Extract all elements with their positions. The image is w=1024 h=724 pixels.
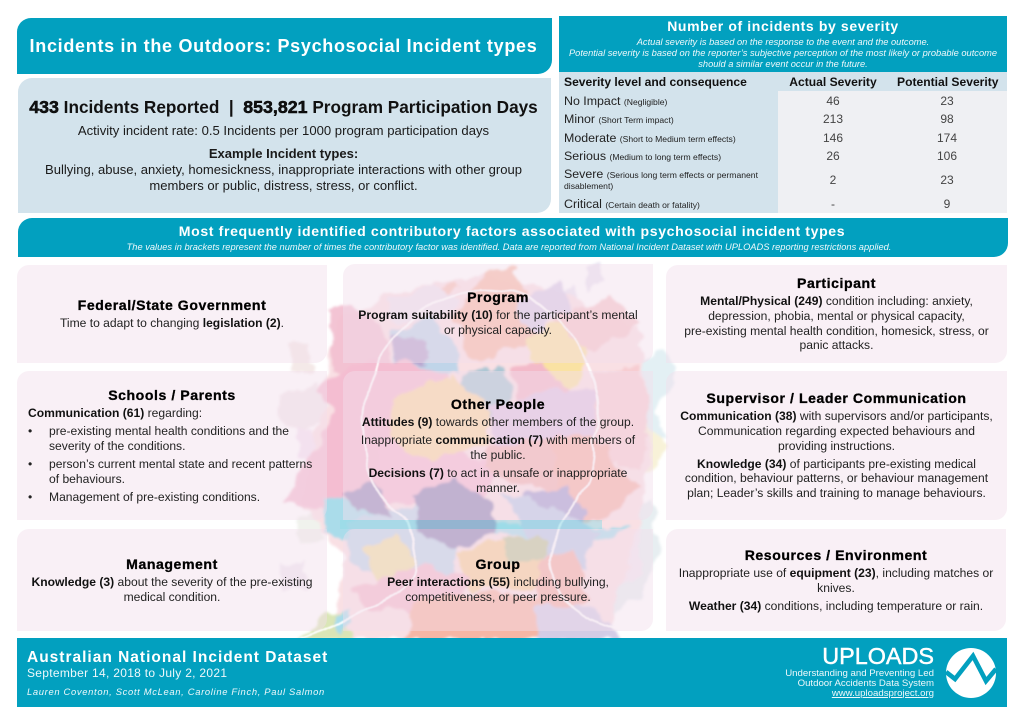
panel: Schools / Parents: pre-existing mental health conditions and the xyxy=(49,424,289,438)
panel: Management: Knowledge (3) about the severity of the pre-existing xyxy=(32,575,312,589)
table rows: Critical (Certain death or fatality) xyxy=(564,197,700,211)
UPLOADS wordmark xyxy=(785,643,934,699)
footer xyxy=(17,638,1007,707)
panel: Other People xyxy=(343,371,653,520)
dataset title: Australian National Incident Dataset xyxy=(27,649,328,666)
panel: Participant xyxy=(666,265,1007,363)
panel: Program: Program xyxy=(467,289,529,305)
panel: Resources / Environment: Inappropriate use of equipment (23), including matches or xyxy=(679,566,993,580)
contributory factors banner: The values in brackets represent the number of times the contributory factor was identified. Data are reported from National Incident Dataset with UPLOADS reporting restrictions applied. xyxy=(127,242,891,252)
severity heading: Potential severity is based on the reporter’s subjective perception of the most likely or probable outcome xyxy=(569,48,997,58)
panel: Schools / Parents: Management of pre-existing conditions. xyxy=(49,490,260,504)
title banner: Incidents in the Outdoors: Psychosocial Incident types xyxy=(30,36,537,56)
panel: Management: medical condition. xyxy=(124,590,220,604)
table rows: 2 xyxy=(830,173,836,187)
panel: Group: competitiveness, or peer pressure. xyxy=(405,590,591,604)
example incident types: members or public, distress, stress, or conflict. xyxy=(149,178,418,193)
table rows: 98 xyxy=(940,112,954,126)
table rows: 26 xyxy=(826,149,840,163)
title banner xyxy=(17,18,552,74)
panel: Schools / Parents: person’s current mental state and recent patterns xyxy=(49,457,312,471)
panel: Group xyxy=(343,529,653,631)
panel: Supervisor / Leader Communication: plan; Leader’s skills and training to manage behaviours. xyxy=(687,486,986,500)
panel: Federal/State Government xyxy=(17,265,327,363)
panel: Federal/State Government: Federal/State Government xyxy=(78,297,266,313)
example incident types: Bullying, abuse, anxiety, homesickness, inappropriate interactions with other group xyxy=(45,162,522,177)
panel: Management: Management xyxy=(126,556,218,572)
panel: Other People: manner. xyxy=(476,481,520,495)
panel: Federal/State Government: Time to adapt to changing legislation (2). xyxy=(60,316,284,330)
table header row: Actual Severity xyxy=(789,74,877,88)
icon: UPLOADS logo xyxy=(946,648,996,698)
panel: Supervisor / Leader Communication: condition, behaviour patterns, or behaviour management xyxy=(685,471,988,485)
panel: Other People: the public. xyxy=(470,448,526,462)
table rows: Severe (Serious long term effects or permanent xyxy=(564,167,758,181)
panel: Schools / Parents xyxy=(17,371,327,520)
severity heading xyxy=(559,16,1007,72)
table rows xyxy=(564,94,957,211)
table rows: 146 xyxy=(823,131,843,145)
date range: September 14, 2018 to July 2, 2021 xyxy=(27,666,227,680)
panel: Participant: panic attacks. xyxy=(800,338,873,352)
panel: Group: Group xyxy=(475,556,521,572)
values background xyxy=(778,91,1007,213)
severity heading: Actual severity is based on the response to the event and the outcome. xyxy=(637,36,929,46)
headline totals: 433 Incidents Reported | 853,821 Program Participation Days xyxy=(29,97,538,117)
table header row: Potential Severity xyxy=(897,74,998,88)
panel: Participant: depression, phobia, mental or physical capacity, xyxy=(708,309,965,323)
panel: Other People: Inappropriate communication (7) with members of xyxy=(361,433,635,447)
table header row: Severity level and consequence xyxy=(564,74,747,88)
table rows: 213 xyxy=(823,112,843,126)
panel: Participant: Mental/Physical (249) condition including: anxiety, xyxy=(700,294,973,308)
panel: Supervisor / Leader Communication: Communication regarding expected behaviours and xyxy=(698,424,975,438)
panel: Supervisor / Leader Communication: Knowledge (34) of participants pre-existing medical xyxy=(697,457,976,471)
table rows: Minor (Short Term impact) xyxy=(564,112,674,126)
UPLOADS wordmark: Understanding and Preventing Led xyxy=(785,668,934,679)
panel: Program xyxy=(343,264,653,363)
table rows: 106 xyxy=(937,149,957,163)
panel: Program: Program suitability (10) for the participant’s mental xyxy=(358,308,638,322)
table rows: 23 xyxy=(940,94,954,108)
panel: incidents by severity xyxy=(559,16,1007,213)
contributory factors banner xyxy=(18,218,1008,257)
panel: Supervisor / Leader Communication: Supervisor / Leader Communication xyxy=(706,390,967,406)
panel: Resources / Environment: Resources / Environment xyxy=(745,547,927,563)
panel: Resources / Environment xyxy=(666,529,1006,631)
panel: summary statistics xyxy=(18,78,551,213)
panel: Schools / Parents: severity of the conditions. xyxy=(49,439,185,453)
panel: Schools / Parents: Communication (61) regarding: xyxy=(28,406,202,420)
panel: Management xyxy=(17,529,327,631)
panel: Supervisor / Leader Communication: providing instructions. xyxy=(778,439,895,453)
contributory factors banner: Most frequently identified contributory factors associated with psychosocial incident types xyxy=(179,223,845,239)
example incident types: Example Incident types: xyxy=(209,146,358,161)
panel: Schools / Parents: Schools / Parents xyxy=(108,387,236,403)
panel: Program: or physical capacity. xyxy=(444,323,552,337)
example incident types xyxy=(45,146,522,193)
UPLOADS wordmark: Outdoor Accidents Data System xyxy=(798,678,934,689)
table rows: 9 xyxy=(944,197,950,211)
panel: Participant: Participant xyxy=(797,275,876,291)
table rows: No Impact (Negligible) xyxy=(564,94,667,108)
panel: Other People: Attitudes (9) towards other members of the group. xyxy=(362,415,634,429)
severity heading: should a similar event occur in the future. xyxy=(698,58,868,68)
table header row xyxy=(564,74,998,88)
table rows: 46 xyxy=(826,94,840,108)
table rows: - xyxy=(831,197,835,211)
table rows: disablement) xyxy=(564,181,613,191)
incident rate: Activity incident rate: 0.5 Incidents per 1000 program participation days xyxy=(78,123,489,138)
panel: Group: Peer interactions (55) including bullying, xyxy=(387,575,609,589)
table rows: Serious (Medium to long term effects) xyxy=(564,149,721,163)
UPLOADS wordmark: www.uploadsproject.org xyxy=(832,688,934,699)
severity heading: Number of incidents by severity xyxy=(667,18,899,34)
panel: Resources / Environment: knives. xyxy=(817,581,855,595)
table rows: 23 xyxy=(940,173,954,187)
soft wash xyxy=(300,275,650,638)
UPLOADS wordmark: UPLOADS xyxy=(822,643,934,669)
panel: Other People: Decisions (7) to act in a unsafe or inappropriate xyxy=(369,466,627,480)
table rows: Moderate (Short to Medium term effects) xyxy=(564,131,736,145)
panel: Other People: Other People xyxy=(451,396,545,412)
panel: Supervisor / Leader Communication: Communication (38) with supervisors and/or participants, xyxy=(680,409,993,423)
panel: Participant: pre-existing mental health condition, homesick, stress, or xyxy=(684,324,989,338)
panel: Resources / Environment: Weather (34) conditions, including temperature or rain. xyxy=(689,599,983,613)
table rows: 174 xyxy=(937,131,957,145)
panel: Supervisor / Leader Communication xyxy=(666,371,1007,520)
panel: Schools / Parents: of behaviours. xyxy=(49,472,125,486)
authors: Lauren Coventon, Scott McLean, Caroline Finch, Paul Salmon xyxy=(27,686,325,697)
